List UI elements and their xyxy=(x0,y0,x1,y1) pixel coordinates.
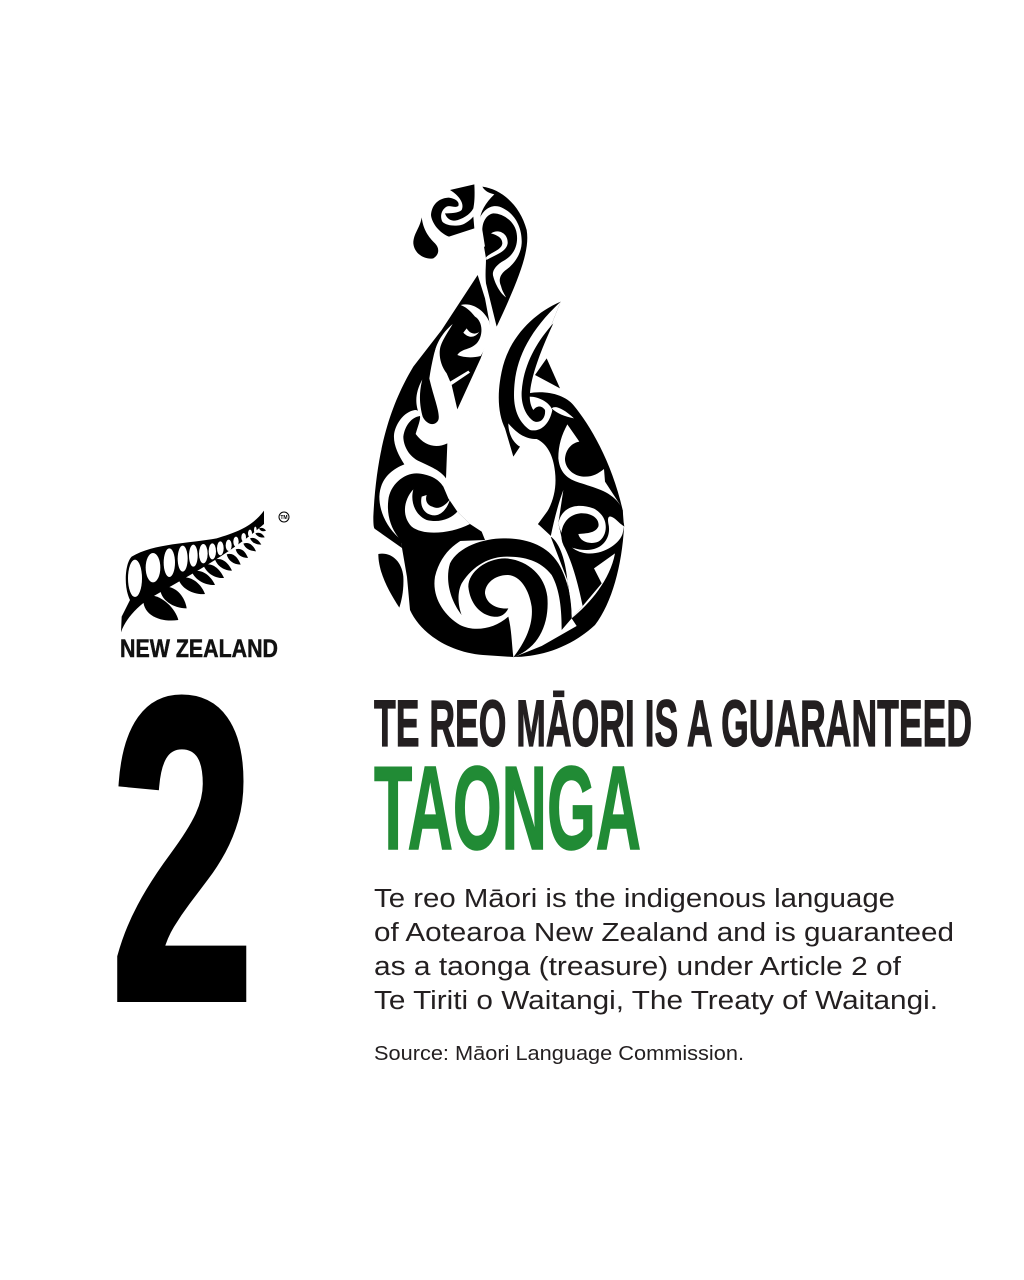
hook lower body base xyxy=(402,490,624,657)
trademark symbol xyxy=(279,512,289,522)
fern lower leaflets xyxy=(143,528,266,621)
body paragraph xyxy=(374,885,954,1015)
trademark symbol: TM xyxy=(280,515,288,521)
icon: hei matau carved fish hook xyxy=(373,184,624,657)
hook teardrop xyxy=(378,554,403,608)
hook bottom spirals xyxy=(434,487,624,657)
body paragraph: Te reo Māori is the indigenous language xyxy=(374,885,895,913)
big number 2: 2 xyxy=(111,610,254,1089)
heading accent: TAONGA: TAONGA xyxy=(374,742,641,875)
body paragraph: of Aotearoa New Zealand and is guaranteed xyxy=(374,919,954,947)
wordmark: NEW ZEALAND xyxy=(120,635,278,663)
hook right body and prong xyxy=(499,302,623,528)
hook left column xyxy=(373,275,489,548)
logo: silver fern New Zealand xyxy=(120,511,289,663)
body paragraph: Te Tiriti o Waitangi, The Treaty of Waitangi. xyxy=(374,987,938,1015)
source note: Source: Māori Language Commission. xyxy=(374,1043,744,1065)
body paragraph: as a taonga (treasure) under Article 2 of xyxy=(374,953,902,981)
icon: silver fern xyxy=(121,511,266,632)
hook head xyxy=(413,184,527,327)
